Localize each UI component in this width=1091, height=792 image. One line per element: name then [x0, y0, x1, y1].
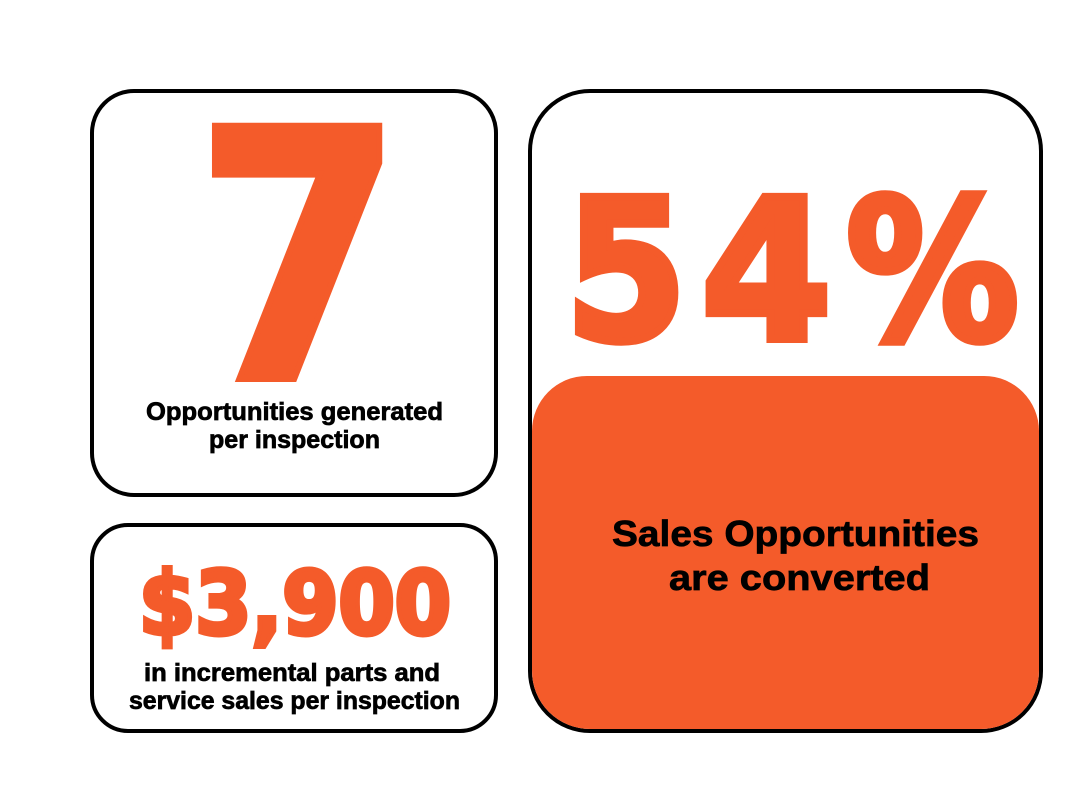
big number 54%: 5: [565, 158, 687, 385]
label: sales opportunities are converted: [612, 513, 979, 598]
label: sales opportunities are converted: Sales Opportunities: [612, 513, 979, 554]
label: opportunities generated per inspection: Opportunities generated: [146, 398, 443, 426]
orange callout panel: [532, 376, 1039, 729]
panel: conversion rate: [530, 91, 1041, 731]
big number 54%: %: [846, 158, 1019, 385]
big number 7: 7: [195, 58, 403, 460]
big number $3,900: $3,900: [139, 553, 451, 655]
big number 54%: 4: [701, 158, 832, 385]
label: incremental parts and service sales: service sales per inspection: [129, 687, 460, 715]
label: sales opportunities are converted: are converted: [669, 557, 930, 598]
label: opportunities generated per inspection: per inspection: [209, 426, 380, 454]
label: incremental parts and service sales: [129, 659, 460, 715]
label: opportunities generated per inspection: [146, 398, 443, 454]
label: incremental parts and service sales: in incremental parts and: [144, 659, 440, 687]
panel: opportunities per inspection: [92, 58, 496, 495]
panel: incremental sales: [92, 525, 496, 731]
big number 54%: [565, 158, 1019, 385]
